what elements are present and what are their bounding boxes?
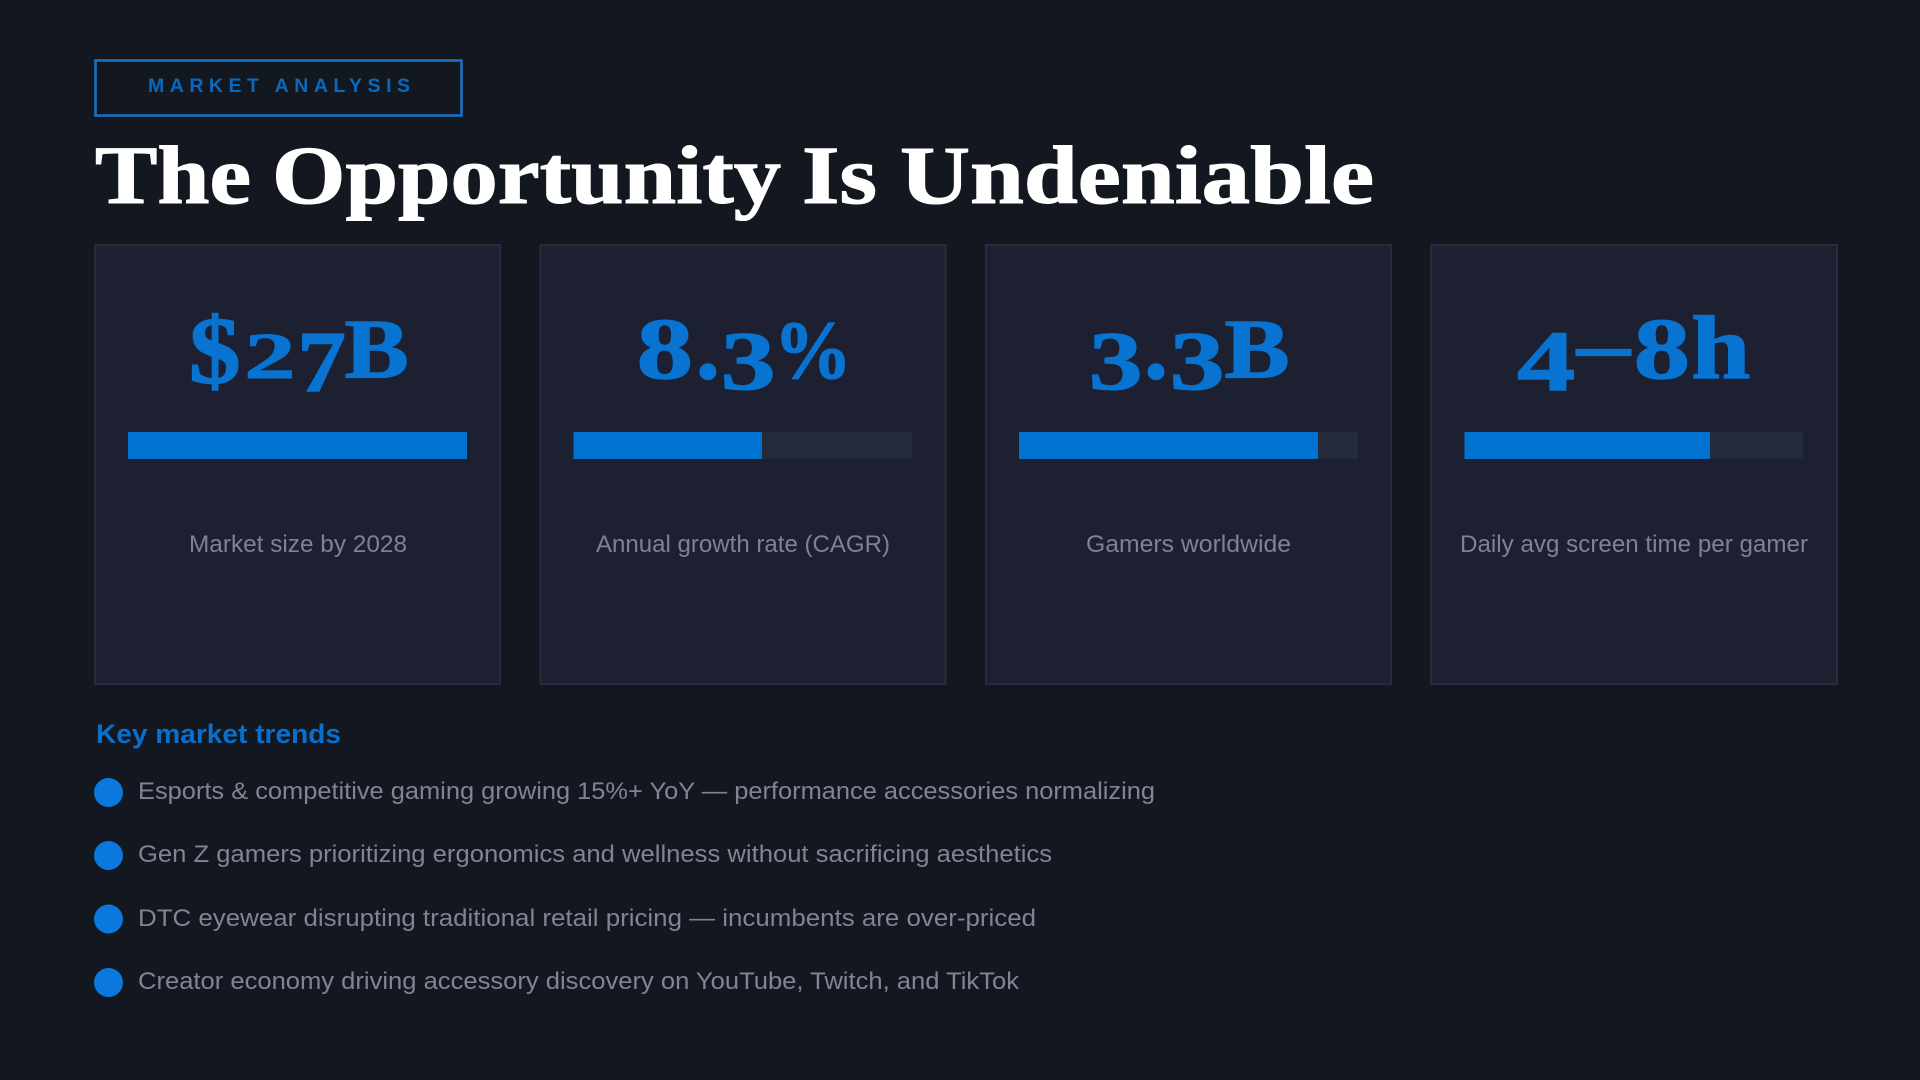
label: market size by 2028: Market size by 2028: [189, 531, 407, 558]
label: daily screen time: Daily avg screen time per gamer: [1460, 531, 1808, 558]
stat: $27B: $: [189, 299, 241, 404]
label: annual growth rate: Annual growth rate (CAGR): [596, 531, 890, 558]
title: Opportunity: [272, 129, 781, 221]
bullet: dtc eyewear: DTC eyewear disrupting traditional retail pricing — incumbents are over-priced: [138, 905, 1036, 932]
title: Is: [802, 129, 877, 221]
stat: 3.3B: 3: [1089, 314, 1143, 407]
list: market trends: [94, 778, 1155, 997]
bullet: gen z: Gen Z gamers prioritizing ergonomics and wellness without sacrificing aesthetics: [138, 841, 1052, 868]
title: The: [95, 129, 251, 221]
stat: 8.3%: %: [774, 305, 852, 397]
stat: $27B: B: [344, 302, 409, 396]
stat: 8.3%: .: [696, 293, 720, 399]
stat: 4–8h: –: [1576, 297, 1631, 391]
title: Undeniable: [900, 129, 1374, 221]
stat: 3.3B: [1089, 293, 1290, 408]
panel: annual growth: [540, 245, 946, 684]
panel: daily screen time: [1431, 245, 1837, 684]
panel: gamers worldwide: [986, 245, 1391, 684]
heading: key market trends: Key market trends: [96, 719, 341, 749]
stat: $27B: 2: [244, 319, 296, 393]
badge: market analysis: MARKET ANALYSIS: [148, 75, 410, 97]
stat: 3.3B: 3: [1170, 315, 1225, 408]
progress bar: 55.7%: [574, 432, 912, 459]
stat: 3.3B: .: [1144, 293, 1168, 399]
stat: 3.3B: B: [1224, 301, 1290, 396]
stat: 8.3%: 3: [721, 315, 776, 408]
stat: 4–8h: 8: [1634, 300, 1690, 397]
label: gamers worldwide: Gamers worldwide: [1086, 531, 1291, 558]
stat: 4–8h: [1517, 297, 1750, 409]
bullet: esports: Esports & competitive gaming growing 15%+ YoY — performance accessories normalizing: [138, 778, 1155, 805]
bullet: creator economy: Creator economy driving accessory discovery on YouTube, Twitch, and TikTok: [138, 968, 1020, 995]
stat: $27B: [189, 299, 409, 410]
panel: market size: [95, 245, 500, 684]
progress bar: 88%: [1019, 432, 1358, 459]
progress bar: 72%: [1464, 432, 1804, 459]
stat: $27B: 7: [297, 314, 346, 410]
progress bar: 100%: [128, 432, 467, 459]
stat: 8.3%: 8: [637, 300, 693, 397]
stat: 4–8h: 4: [1517, 314, 1575, 409]
stat: 8.3%: [637, 293, 852, 408]
badge: market analysis: [96, 60, 462, 116]
stat: 4–8h: h: [1691, 298, 1750, 398]
